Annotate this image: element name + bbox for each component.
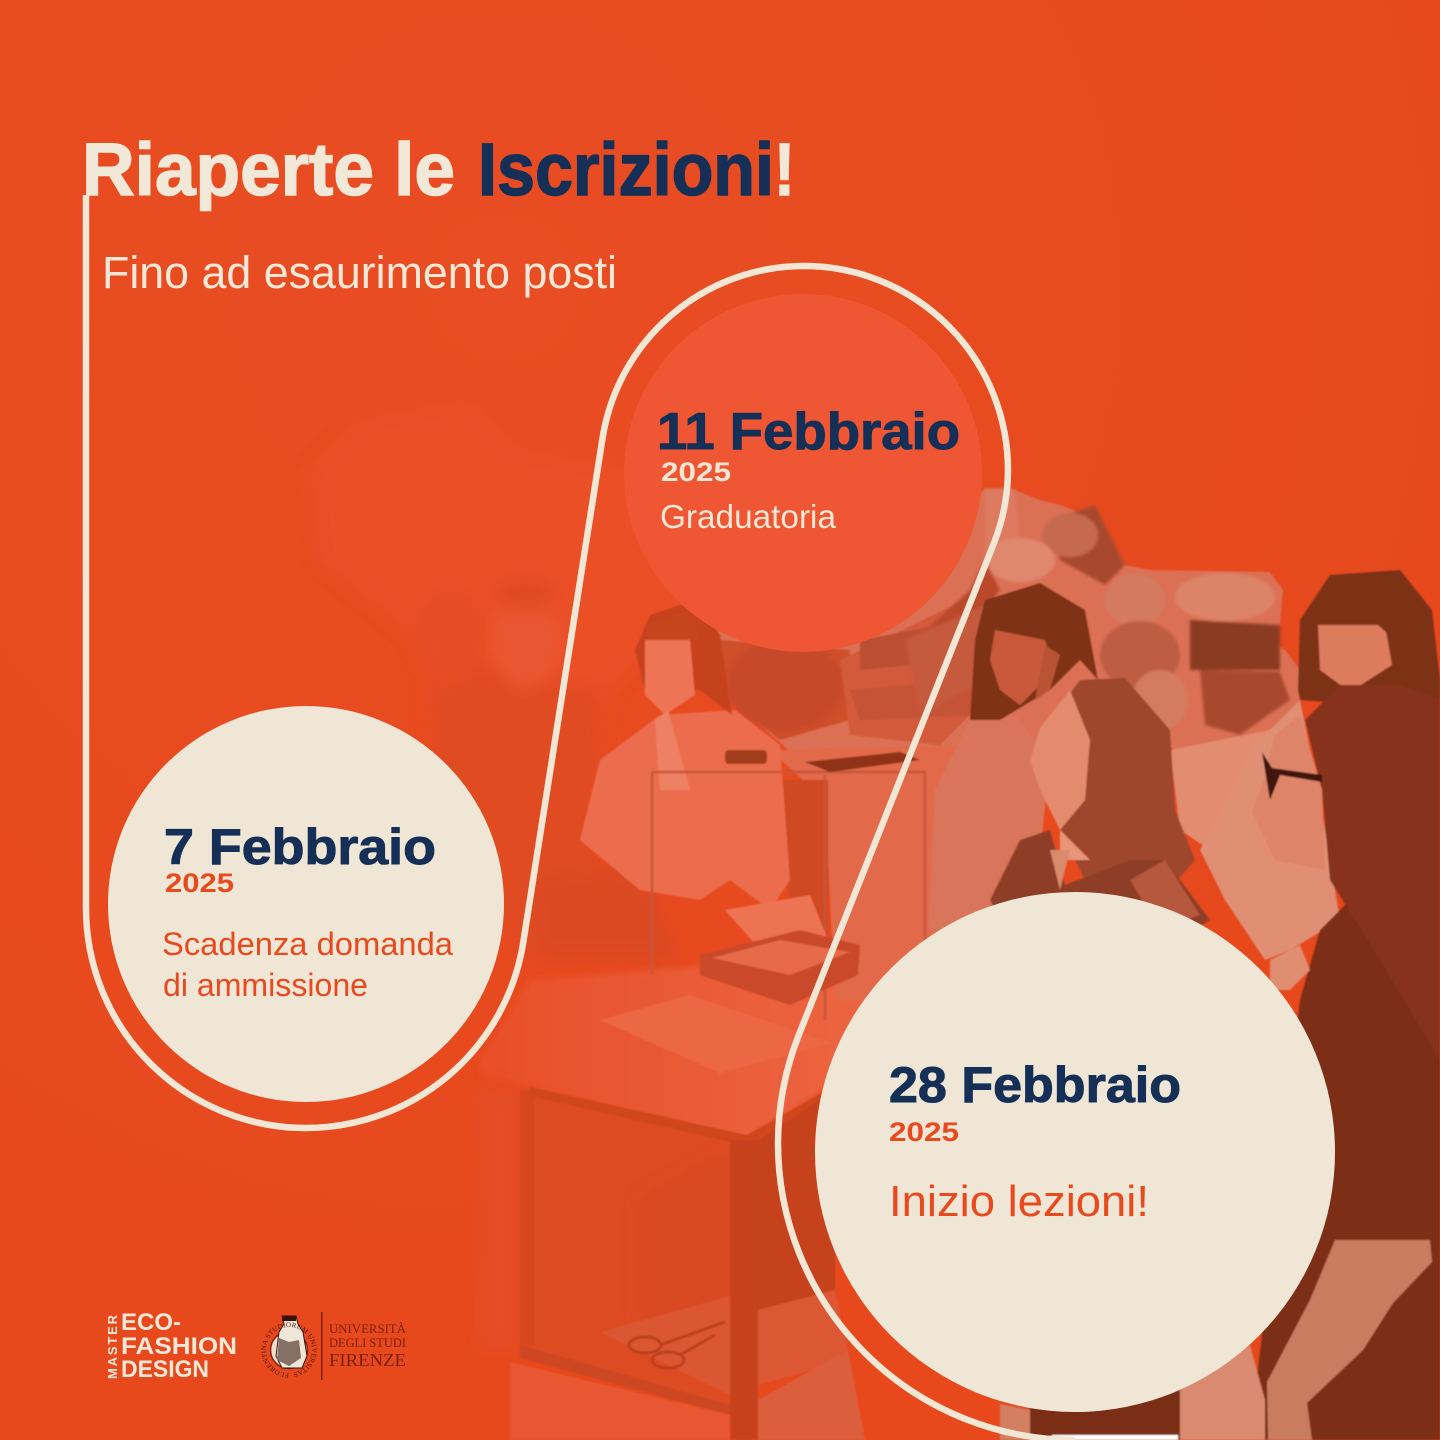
- logo divider and university name: [321, 1312, 406, 1380]
- circle: 28 Febbraio: 28 Febbraio: [889, 1057, 1181, 1113]
- rock wall and middle bales: [640, 488, 1300, 800]
- circle: 7 Febbraio: di ammissione: [163, 967, 368, 1003]
- scale: [700, 895, 860, 1005]
- faint left scene: [310, 400, 700, 960]
- circle: 28 Febbraio: [815, 892, 1335, 1412]
- floor and table top: [480, 950, 960, 1140]
- logo: Master Eco-Fashion Design: ECO-: [121, 1309, 181, 1336]
- logo: Università degli Studi di Firenze seal: FLORENTINA STUDIORUM UNIVERSITAS: [261, 1322, 317, 1378]
- girl: [990, 678, 1210, 950]
- circle: 7 Febbraio: Scadenza domanda: [162, 926, 453, 962]
- photo: students and textile bales: [310, 400, 1440, 1440]
- circle: 11 Febbraio: [624, 294, 982, 652]
- circle: 11 Febbraio: 11 Febbraio: [657, 403, 960, 461]
- woman with glasses shirt: [1200, 700, 1340, 960]
- logo: Master Eco-Fashion Design: FASHION: [121, 1333, 237, 1360]
- table box: [520, 1095, 745, 1410]
- circle: 7 Febbraio: 7 Febbraio: [164, 819, 436, 875]
- title: Riaperte le: [82, 128, 455, 211]
- logo: Master Eco-Fashion Design: [105, 1309, 237, 1383]
- woman with glasses dark hair, top and arm: [1000, 685, 1440, 1440]
- title: !: [774, 128, 795, 211]
- bales right: [905, 490, 1290, 735]
- logo divider and university name: UNIVERSITÀ: [329, 1322, 406, 1336]
- circle: 28 Febbraio: Inizio lezioni!: [889, 1177, 1149, 1226]
- circle: 11 Febbraio: 2025: [661, 457, 731, 487]
- logo: Master Eco-Fashion Design: DESIGN: [121, 1356, 209, 1383]
- title: [82, 128, 795, 211]
- title: Iscrizioni: [478, 128, 774, 211]
- logo divider and university name: DEGLI STUDI: [329, 1336, 406, 1350]
- timeline connector line: [86, 195, 1075, 1440]
- circle: 11 Febbraio: Graduatoria: [660, 498, 837, 535]
- subtitle: Fino ad esaurimento posti: [102, 247, 617, 298]
- circle: 7 Febbraio: 2025: [165, 868, 234, 898]
- scissors: [629, 1322, 725, 1368]
- glass display stand and table items: [652, 772, 925, 1020]
- curly hair woman: [1298, 570, 1440, 710]
- circle: 7 Febbraio: [108, 706, 504, 1102]
- boy: [928, 583, 1098, 950]
- circle: 28 Febbraio: 2025: [889, 1117, 959, 1147]
- central woman: [580, 600, 790, 910]
- logo divider and university name: FIRENZE: [329, 1350, 406, 1370]
- logo: Master Eco-Fashion Design: MASTER: [105, 1314, 120, 1379]
